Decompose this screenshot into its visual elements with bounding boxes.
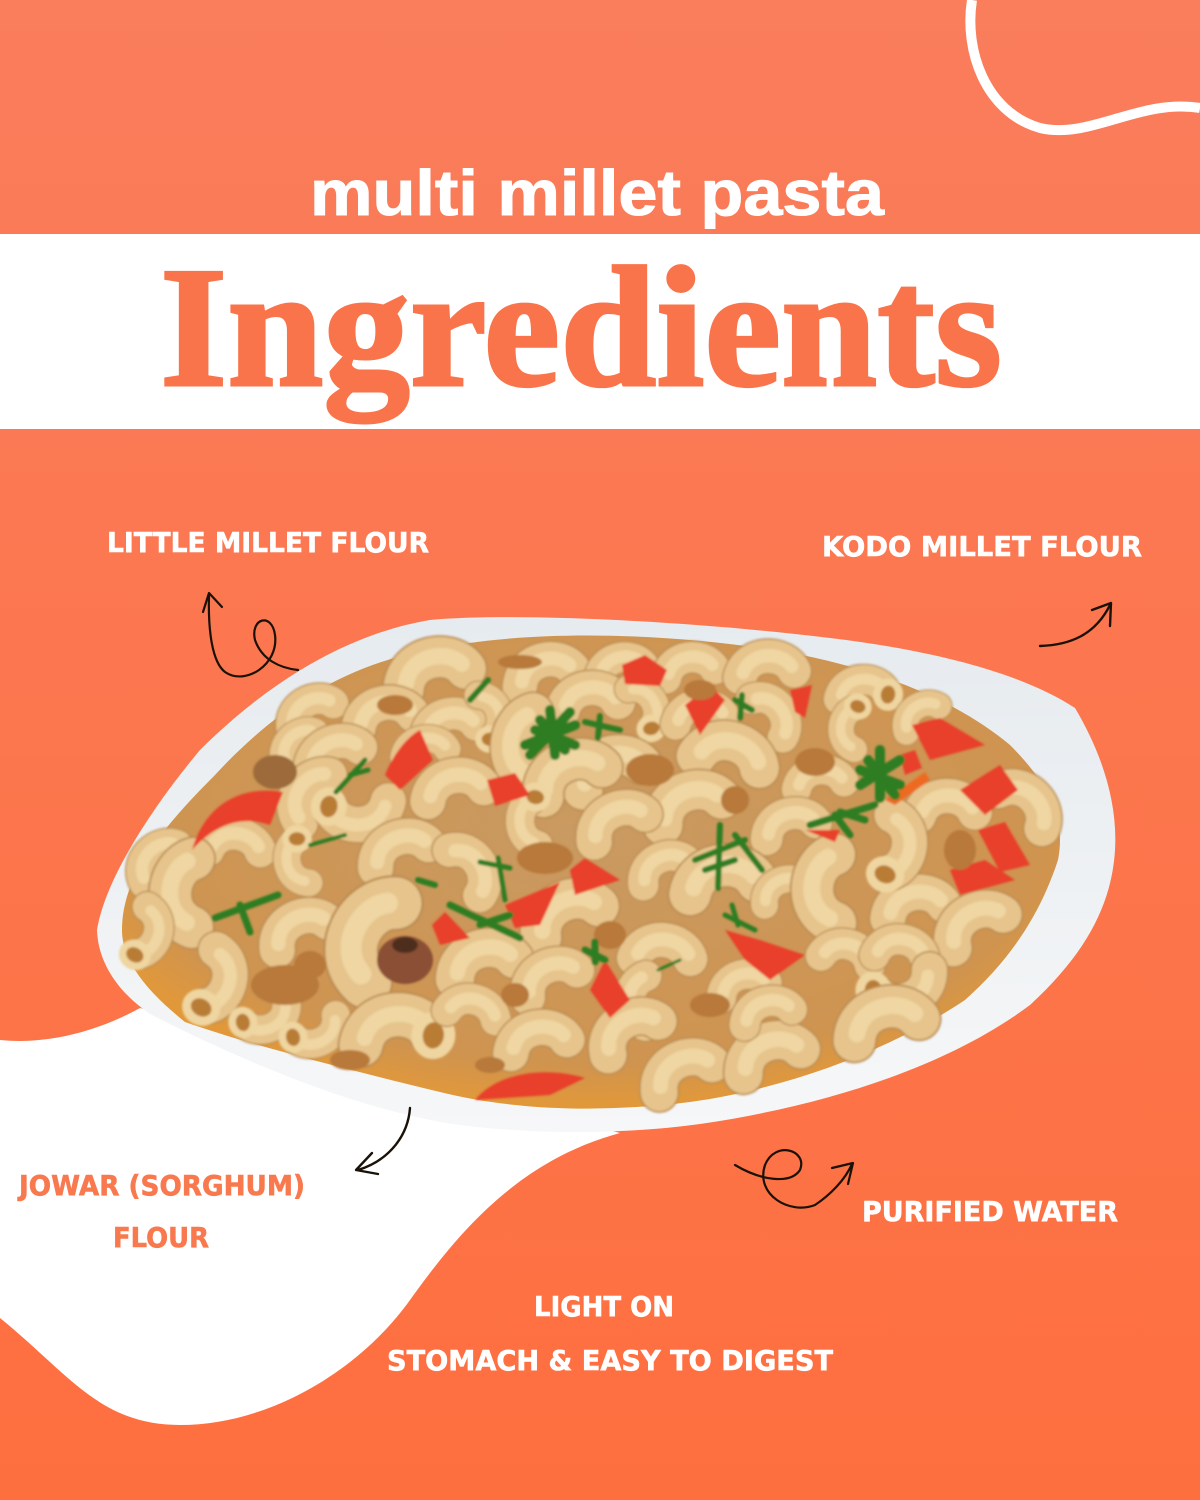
- parsley: [215, 680, 900, 970]
- title band: [0, 234, 1200, 429]
- arrow: purified water: [735, 1150, 853, 1208]
- label: jowar (sorghum) flour: [17, 1169, 305, 1254]
- sauce and food base: [122, 636, 1060, 1109]
- label: jowar (sorghum) flour: JOWAR (SORGHUM): [17, 1169, 305, 1202]
- arrow: kodo millet: [1040, 603, 1111, 646]
- plate: [97, 617, 1115, 1132]
- heading: multi millet pasta: multi millet pasta: [310, 157, 884, 229]
- plate of pasta: [97, 617, 1115, 1132]
- label: little millet flour: LITTLE MILLET FLOUR: [107, 526, 429, 559]
- decorative white blob: [0, 1008, 620, 1425]
- tomatoes: [192, 655, 1030, 1100]
- front pasta: [332, 893, 417, 982]
- tagline: STOMACH & EASY TO DIGEST: [387, 1344, 833, 1377]
- corner squiggle: [970, 0, 1200, 130]
- arrow: little millet: [203, 593, 298, 676]
- pasta, tomatoes, meat and parsley: [113, 650, 1051, 1100]
- tagline: [387, 1290, 833, 1377]
- arrow: jowar: [356, 1108, 410, 1174]
- label: purified water: PURIFIED WATER: [862, 1195, 1118, 1228]
- tagline: LIGHT ON: [534, 1290, 674, 1323]
- label: jowar (sorghum) flour: FLOUR: [113, 1221, 209, 1254]
- title: Ingredients: Ingredients: [160, 233, 1002, 423]
- back pasta: [403, 656, 466, 690]
- ground meat: [251, 655, 976, 1073]
- label: kodo millet flour: KODO MILLET FLOUR: [822, 530, 1142, 563]
